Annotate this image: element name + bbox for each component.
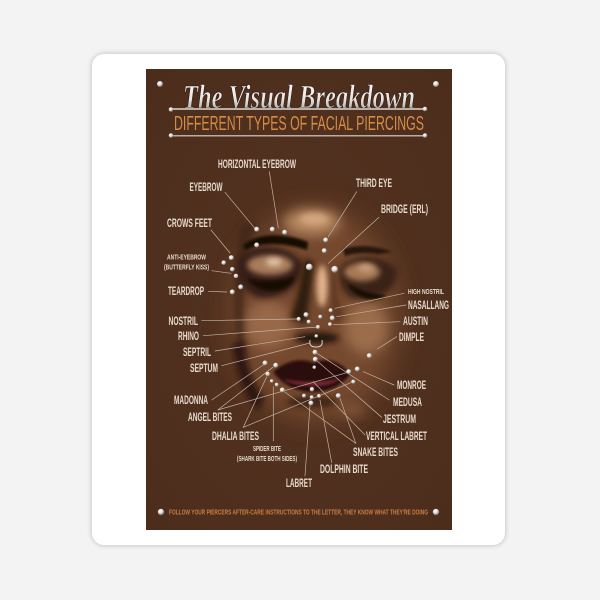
lips [273,360,350,392]
label: angel bites: ANGEL BITES [188,412,232,424]
label: bridge: BRIDGE (ERL) [381,204,428,216]
label: septum [190,343,310,375]
label: nasallang [337,300,449,317]
label: septril: SEPTRIL [183,347,211,359]
label: austin: AUSTIN [403,316,428,328]
eyelash right [348,284,386,299]
hair shadow upper [234,222,256,350]
title: The Visual Breakdown [183,79,415,116]
hair shadow lower [232,342,264,410]
eye socket right [340,257,397,300]
label: labret: LABRET [286,478,312,490]
label: bridge [328,204,428,263]
label: third eye: THIRD EYE [356,178,392,190]
forehead highlight [284,209,340,235]
label: high nostril: HIGH NOSTRIL [408,287,444,296]
cheek left [244,301,292,349]
corner rivets [157,81,439,87]
nose highlight [316,265,328,307]
label: medusa [316,353,422,409]
label: madonna: MADONNA [174,395,208,407]
label: spider bite [237,387,297,463]
label: high nostril [335,287,444,308]
eyelid right [344,263,380,281]
eyelid left [247,255,293,275]
label: vertical labret: VERTICAL LABRET [366,431,427,443]
label: horizontal eyebrow [218,159,296,228]
label: dhalia bites [212,377,353,443]
label: rhino: RHINO [178,331,199,343]
sticker shadow [91,53,506,546]
chin shadow [286,396,338,408]
label: monroe [363,372,426,392]
label: spider bite: SPIDER BITE [253,444,281,453]
label: nostril [168,316,297,328]
eye socket left [238,247,302,298]
label: third eye [328,178,392,237]
piercing dots [221,227,372,406]
chin highlight [338,404,366,416]
label: anti-eyebrow: (BUTTERFLY KISS) [164,264,209,272]
face base [231,209,399,421]
eyelid right highlight [358,264,374,272]
label: angel bites [188,367,348,424]
lip gloss [283,378,341,386]
eyelash left [248,277,294,291]
face illustration [231,209,399,421]
label: snake bites: SNAKE BITES [353,447,398,459]
lower title rule [169,133,427,138]
label: spider bite: (SHARK BITE BOTH SIDES) [237,454,297,463]
label: nasallang: NASALLANG [408,300,449,312]
label: eyebrow: EYEBROW [190,182,223,194]
label: horizontal eyebrow: HORIZONTAL EYEBROW [218,159,296,171]
nose shadow left [290,258,314,324]
label: dolphin bite: DOLPHIN BITE [320,464,368,476]
septum ring [310,340,322,347]
label: dhalia bites: DHALIA BITES [212,431,259,443]
label: septum: SEPTUM [190,363,218,375]
footer note: FOLLOW YOUR PIERCERS AFTER-CARE INSTRUCTIONS TO THE LETTER, THEY KNOW WHAT THEY'RE DOING [169,510,428,516]
label: vertical labret [313,382,427,443]
eyelid left highlight [266,258,282,266]
nose shadow right [330,262,344,324]
callout labels [164,159,449,490]
under nose shadow [295,332,339,344]
label: monroe: MONROE [397,380,426,392]
label: crows feet: CROWS FEET [167,218,212,230]
label: jestrum: JESTRUM [383,414,416,426]
label: anti-eyebrow: ANTI-EYEBROW [167,254,206,262]
footer note [158,509,439,516]
label: anti-eyebrow [164,254,231,273]
label: rhino [178,327,318,343]
eyebrow right [343,246,392,256]
eyebrow left [243,235,308,250]
forehead hotspot [300,213,328,225]
label: eyebrow [190,182,254,228]
white sticker [92,54,505,545]
label: dolphin bite [320,400,368,476]
label: nostril: NOSTRIL [168,316,198,328]
label: snake bites [282,390,398,459]
label: septril [183,337,305,359]
subtitle: DIFFERENT TYPES OF FACIAL PIERCINGS [174,113,424,135]
label: teardrop: TEARDROP [168,286,204,298]
poster panel [146,69,452,530]
label: crows feet [167,218,230,253]
label: jestrum [316,360,416,426]
cheek right [344,302,388,354]
label: medusa: MEDUSA [393,397,422,409]
label: madonna [174,365,263,407]
label: dimple: DIMPLE [399,332,424,344]
label: austin [333,316,428,328]
upper title rule [169,107,427,112]
label: dimple [377,332,424,349]
label: labret [286,405,312,490]
